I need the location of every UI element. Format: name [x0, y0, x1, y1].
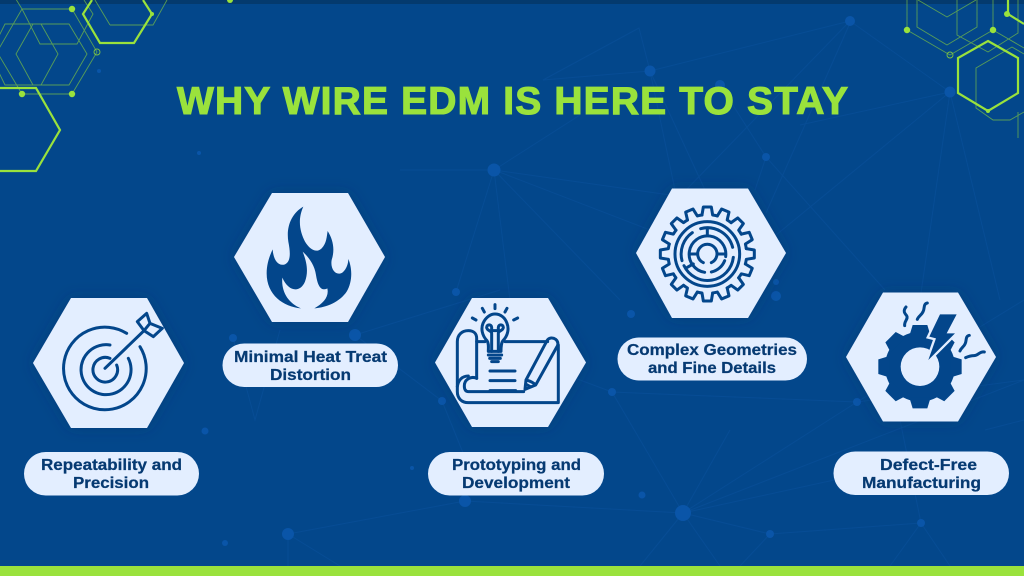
label pill: Defect-Free [880, 457, 977, 474]
title: WHY WIRE EDM IS HERE TO STAY [177, 80, 848, 123]
icon: target with arrow [64, 313, 162, 410]
hexagon [636, 188, 786, 318]
label pill [428, 452, 604, 496]
icon: flame [267, 207, 351, 308]
panel: complex geometries and fine details [618, 188, 807, 380]
top strip [0, 0, 1024, 4]
bottom green bar [0, 566, 1024, 576]
panel: repeatability and precision [24, 298, 199, 496]
decorative hexagons: top left [0, 0, 233, 171]
label pill: Distortion [270, 367, 351, 384]
label pill: Manufacturing [862, 475, 981, 492]
hexagon [234, 193, 385, 322]
hexagon [435, 298, 586, 427]
panel: prototyping and development [428, 298, 604, 496]
label pill [618, 338, 807, 380]
label pill [24, 452, 199, 496]
decorative hexagons: top right [904, 0, 1024, 138]
icon: gear with maze [660, 207, 755, 301]
label pill [222, 344, 398, 387]
label pill: Minimal Heat Treat [234, 349, 388, 366]
label pill: and Fine Details [648, 360, 776, 377]
label pill: Prototyping and [452, 457, 581, 474]
icon: gear with lightning bolt [878, 303, 984, 408]
label pill: Development [462, 475, 571, 492]
icon: blueprint, lightbulb and pencil [457, 305, 558, 403]
label pill: Precision [73, 475, 149, 492]
panel: defect-free manufacturing [834, 292, 1009, 495]
label pill: Repeatability and [41, 457, 182, 474]
hexagon [846, 292, 996, 422]
panel: minimal heat treat distortion [222, 193, 398, 387]
label pill [834, 452, 1009, 495]
hexagon [33, 298, 184, 428]
label pill: Complex Geometries [627, 342, 797, 359]
